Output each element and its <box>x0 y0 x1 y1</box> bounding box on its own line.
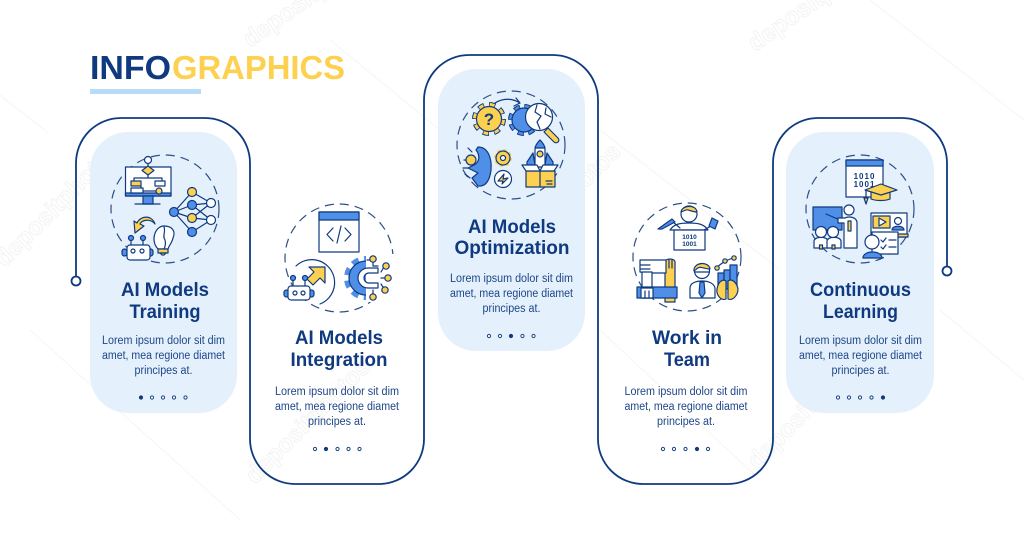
text block: training description <box>102 335 226 377</box>
light bulb with brain <box>154 226 174 255</box>
text block: integration description: Lorem ipsum dolor sit dim <box>275 386 399 398</box>
heading: AI Models Integration: Integration <box>290 350 388 371</box>
binary calendar window <box>846 160 883 197</box>
AI head <box>463 147 491 186</box>
text block: integration description <box>275 386 400 428</box>
chart and brain <box>715 256 738 299</box>
rocket in box <box>522 140 558 187</box>
man with glasses <box>690 264 715 298</box>
programmer with laptop: 1001 <box>682 241 697 248</box>
pagination dots: 4 <box>661 447 710 451</box>
title: INFOGRAPHICS <box>90 50 345 87</box>
graduation cap <box>864 184 897 204</box>
heading: AI Models Optimization <box>454 217 570 259</box>
text block: optimization description: amet, mea regione diamet <box>450 288 574 300</box>
text block: learning description: amet, mea regione diamet <box>799 350 923 362</box>
video panel <box>871 213 908 237</box>
icon: AI models optimization <box>457 91 565 199</box>
refresh symbol <box>494 170 512 188</box>
text block: learning description: Lorem ipsum dolor sit dim <box>799 335 922 347</box>
text block: team description: principes at. <box>657 416 715 428</box>
text block: team description <box>624 386 748 428</box>
magnifier with globe <box>526 104 559 143</box>
robot <box>122 236 153 260</box>
text: depositphotos <box>742 338 878 474</box>
text block: learning description <box>799 335 923 377</box>
blue gear <box>511 107 537 133</box>
binary calendar window: 1010 <box>854 172 875 181</box>
heading: AI Models Training <box>121 280 209 323</box>
heading: Work in Team <box>652 328 722 371</box>
robot with arrow <box>284 260 335 304</box>
heading: Continuous Learning: Learning <box>823 302 898 323</box>
heading: AI Models Optimization: Optimization <box>454 238 570 259</box>
students <box>814 226 841 249</box>
text block: training description: principes at. <box>134 365 192 377</box>
pagination dots: 3 <box>487 334 535 338</box>
programmer with laptop: 1010 <box>682 234 697 241</box>
text block: integration description: principes at. <box>308 416 366 428</box>
teacher at board <box>813 205 857 248</box>
title underline <box>90 89 201 94</box>
gear with circuit <box>347 254 394 302</box>
pagination dots: 5 <box>836 396 885 399</box>
learner <box>863 235 882 258</box>
process arrow <box>495 98 520 106</box>
end node <box>942 266 952 276</box>
text block: team description: Lorem ipsum dolor sit dim <box>624 386 748 398</box>
programmer with laptop <box>658 206 718 250</box>
title: INFOGRAPHICS: GRAPHICS <box>172 50 345 87</box>
pagination dots: 2 <box>313 447 361 451</box>
heading: AI Models Integration: AI Models <box>295 328 383 349</box>
title: INFOGRAPHICS: INFO <box>90 50 171 87</box>
panel: light background AI Models Training <box>90 132 237 413</box>
text block: team description: amet, mea regione diamet <box>624 401 748 413</box>
text block: training description: amet, mea regione diamet <box>102 350 226 362</box>
text block: learning description: principes at. <box>832 365 890 377</box>
heading: AI Models Training: Training <box>130 302 200 323</box>
yellow question gear: ? <box>484 110 494 129</box>
monitor with flowchart <box>126 156 171 204</box>
panel: light background Continuous Learning <box>786 132 934 413</box>
icon: continuous learning <box>806 155 914 263</box>
icon: AI models integration <box>284 204 394 312</box>
icon: AI models training <box>111 155 219 263</box>
start node <box>72 276 80 286</box>
heading: Work in Team: Team <box>664 350 710 371</box>
checklist <box>872 232 898 254</box>
heading: AI Models Optimization: AI Models <box>468 217 556 238</box>
heading: Continuous Learning <box>810 280 911 323</box>
text: depositphotos <box>240 353 376 489</box>
pagination dots: 1 <box>139 396 187 399</box>
heading: AI Models Integration <box>290 328 388 371</box>
arrow <box>134 217 155 233</box>
serpentine outline connecting all panels <box>76 55 947 484</box>
code window <box>319 212 359 252</box>
team hands <box>637 259 677 302</box>
text block: optimization description: principes at. <box>482 303 540 315</box>
heading: Continuous Learning: Continuous <box>810 280 911 301</box>
text block: integration description: amet, mea regione diamet <box>275 401 400 413</box>
small gear <box>496 150 510 166</box>
text: depositphotos <box>490 138 626 274</box>
text block: optimization description: Lorem ipsum dolor sit dim <box>450 273 573 285</box>
text block: training description: Lorem ipsum dolor sit dim <box>102 335 225 347</box>
text block: optimization description <box>450 273 574 315</box>
binary calendar window: 1001 <box>854 180 875 189</box>
panel: light background AI Models Optimization <box>438 69 585 351</box>
heading: AI Models Training: AI Models <box>121 280 209 301</box>
icon: work in team <box>633 203 741 311</box>
heading: Work in Team: Work in <box>652 328 722 349</box>
neural network <box>170 188 216 236</box>
